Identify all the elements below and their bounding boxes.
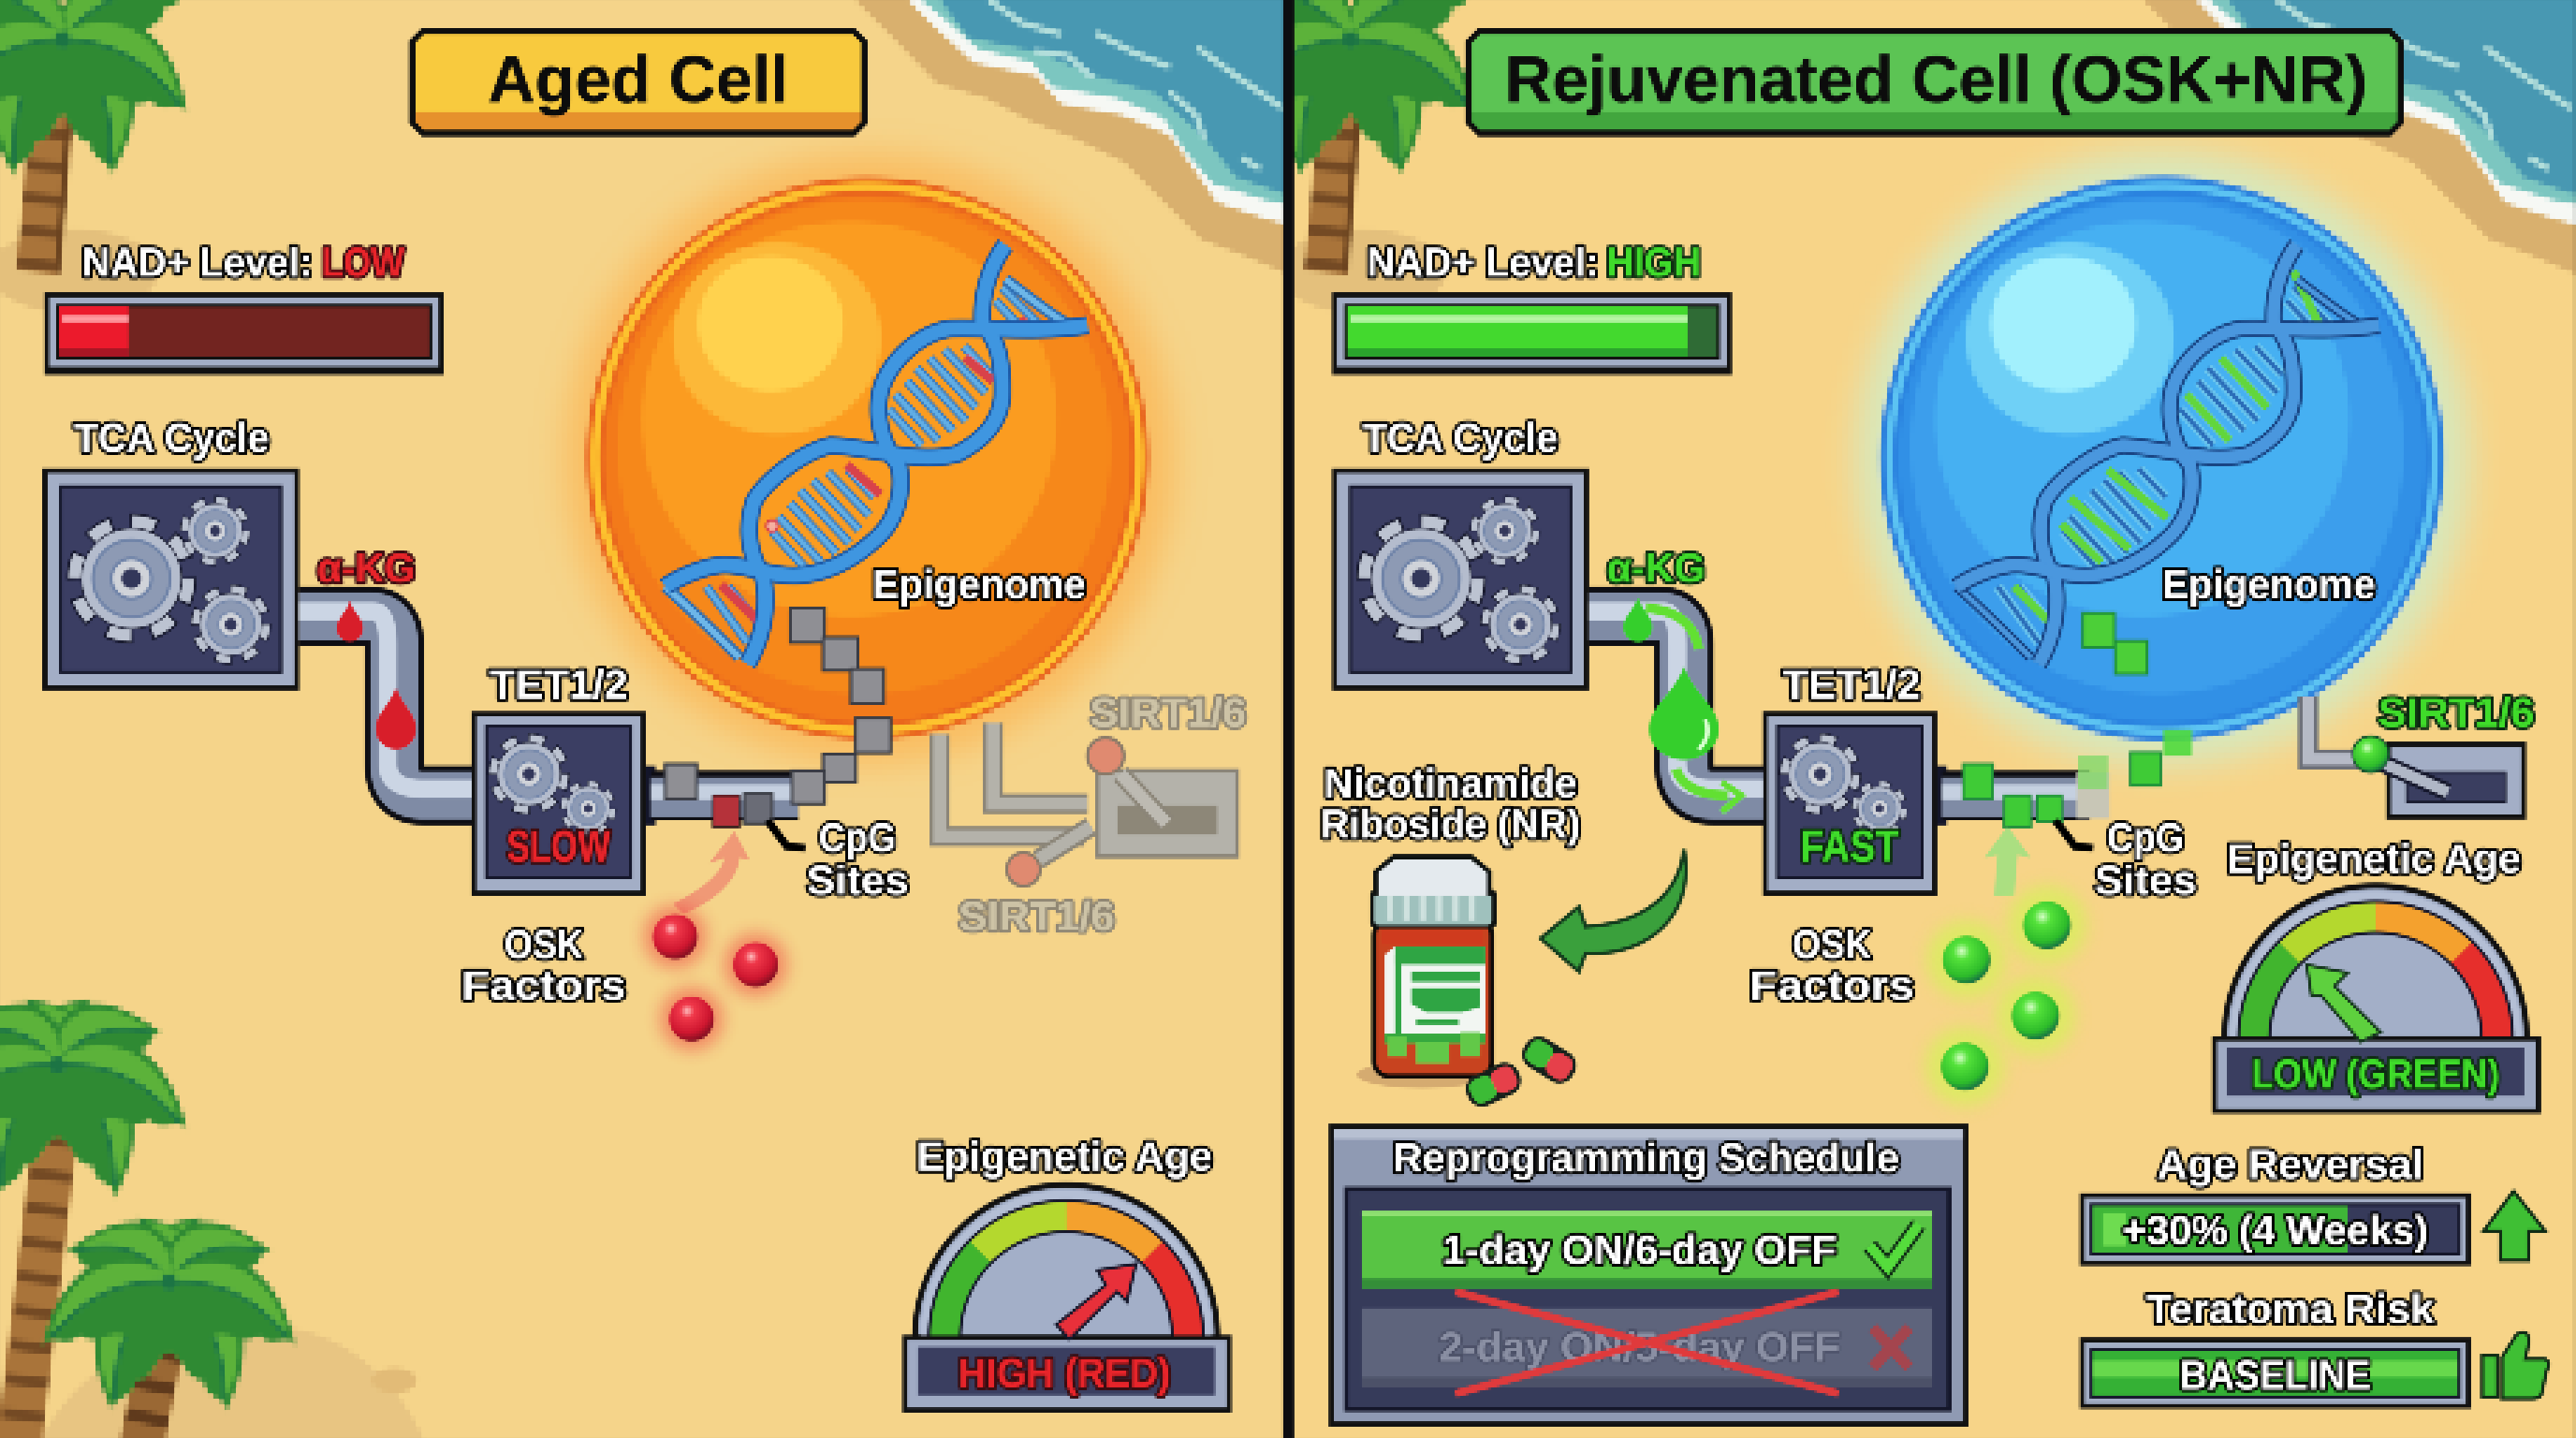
label: Epigenome aged: Epigenome [872,562,1086,608]
beach and palm: right panel [1201,0,2576,314]
leader line: CpG aged [768,820,805,848]
CpG pipe: aged [646,766,798,825]
label: Epigenetic Age rejuvenated: Epigenetic Age [2227,836,2521,882]
alpha-KG drops: aged [337,601,417,749]
curved arrow: NR into pathway [1541,850,1686,971]
heading: Reprogramming Schedule: Reprogramming Schedule [1393,1136,1899,1181]
label: OSK Factors aged: Factors [461,962,626,1008]
NAD+ bar: low [44,292,444,374]
label: CpG Sites rejuvenated: Sites [2095,858,2197,903]
alpha-KG drops: green [1623,597,1719,760]
OSK factor balls: red [644,905,787,1050]
alpha-KG pipe: aged [299,611,476,796]
status: FAST: FAST [1801,822,1899,872]
label: Teratoma Risk: Teratoma Risk [2146,1286,2435,1332]
banner: Rejuvenated Cell [1466,28,2404,137]
label: OSK Factors rejuvenated: OSK [1793,921,1871,967]
label: alpha-KG rejuvenated: α-KG [1606,545,1705,591]
banner: Aged Cell [409,28,868,137]
icon: green up arrow [2484,1192,2545,1260]
leader line: CpG rejuvenated [2056,820,2093,848]
label: OSK Factors aged [461,921,626,1008]
option: 1-day on, selected [1362,1211,1932,1288]
demethylated sites: green squares [1963,613,2191,827]
pipe end fade [2076,772,2110,818]
status: SLOW: SLOW [506,822,610,872]
title: Aged Cell: Aged Cell [488,42,788,116]
label: Epigenetic Age aged: Epigenetic Age [916,1134,1212,1180]
cell: blue rejuvenated cell [1855,151,2470,766]
active SIRT1/6 switch [2308,697,2524,816]
cell: orange aged cell [564,153,1176,764]
label: NAD+ level low: NAD+ Level: [82,240,312,286]
up arrow: strong OSK effect [1984,827,2030,896]
title: Rejuvenated Cell: Rejuvenated Cell (OSK+NR) [1505,42,2367,116]
alpha-KG pipe: rejuvenated [1588,611,1766,796]
gauge reading: high: HIGH (RED) [959,1351,1171,1397]
label: CpG Sites rejuvenated [2095,814,2197,903]
label: TET1/2 rejuvenated: TET1/2 [1782,662,1921,708]
label: NAD+ level high: NAD+ Level: [1367,240,1599,286]
option text: 2-day ON/5-day OFF: 2-day ON/5-day OFF [1439,1324,1840,1370]
label: OSK Factors aged: OSK [505,921,583,967]
label: OSK Factors rejuvenated: Factors [1749,962,1914,1008]
OSK factor balls: green [1925,886,2086,1106]
label: CpG Sites rejuvenated: CpG [2107,814,2184,860]
gauge reading: low: LOW (GREEN) [2251,1051,2499,1097]
label: TET1/2 aged: TET1/2 [490,662,627,708]
label: Age Reversal: Age Reversal [2157,1142,2423,1188]
up arrow: weak OSK effect [674,831,749,914]
label: CpG Sites aged: CpG [819,814,896,860]
value: +30% (4 Weeks): +30% (4 Weeks) [2123,1208,2428,1254]
option: 2-day on, rejected [1362,1308,1932,1387]
TCA cycle machine: rejuvenated [1332,468,1588,690]
DNA helix: rejuvenated [1956,245,2378,664]
green flow in pipe [1647,608,1741,812]
label: SIRT1/6 inactive [959,690,1246,940]
divider [1283,0,1294,1438]
option text: 1-day ON/6-day OFF: 1-day ON/6-day OFF [1442,1227,1837,1273]
TCA cycle machine: aged [43,468,299,690]
DNA helix: aged [666,245,1088,664]
label: Epigenome rejuvenated: Epigenome [2162,562,2376,608]
TET1/2 machine: fast [1763,712,1937,896]
reprogramming schedule panel [1329,1124,1969,1427]
icon: thumbs up [2482,1332,2549,1399]
inactive SIRT1/6 switch [940,723,1237,886]
epigenetic age gauge: low [2215,886,2539,1111]
NR supplement bottle [1357,855,1497,1088]
methylated sites: grey and red squares [666,608,890,827]
label: alpha-KG aged: α-KG [317,545,416,591]
label: CpG Sites aged: Sites [807,858,909,903]
TET1/2 machine: slow [472,712,646,896]
NR capsules [1461,1032,1582,1111]
label: NAD+ level high: HIGH [1606,240,1701,286]
palm tree: upper left [0,0,212,314]
label: CpG Sites aged [807,814,909,903]
red cross over rejected option [1456,1292,1838,1394]
label: Nicotinamide Riboside [1321,760,1580,847]
beach waves: left panel [855,0,1292,276]
label: Nicotinamide Riboside: Riboside (NR) [1321,801,1580,847]
label: Nicotinamide Riboside: Nicotinamide [1325,760,1577,806]
NAD+ bar: high [1332,292,1732,374]
epigenetic age gauge: high [905,1185,1229,1410]
label: NAD+ level low: LOW [322,240,404,286]
label: TCA Cycle rejuvenated: TCA Cycle [1363,416,1559,462]
label: SIRT1/6 inactive: SIRT1/6 [1090,690,1246,736]
value: BASELINE: BASELINE [2180,1352,2371,1398]
label: OSK Factors rejuvenated [1749,921,1914,1008]
teratoma risk bar [2080,1338,2471,1408]
CpG pipe: rejuvenated [1937,766,2089,825]
label: TCA Cycle aged: TCA Cycle [74,416,270,462]
palm tree: lower left small [22,1196,316,1438]
label: SIRT1/6 inactive: SIRT1/6 [959,894,1115,940]
palm tree: lower left large [0,976,208,1438]
label: SIRT1/6 active: SIRT1/6 [2378,690,2534,736]
age reversal bar [2080,1193,2471,1266]
icon: faded X [1873,1328,1909,1367]
